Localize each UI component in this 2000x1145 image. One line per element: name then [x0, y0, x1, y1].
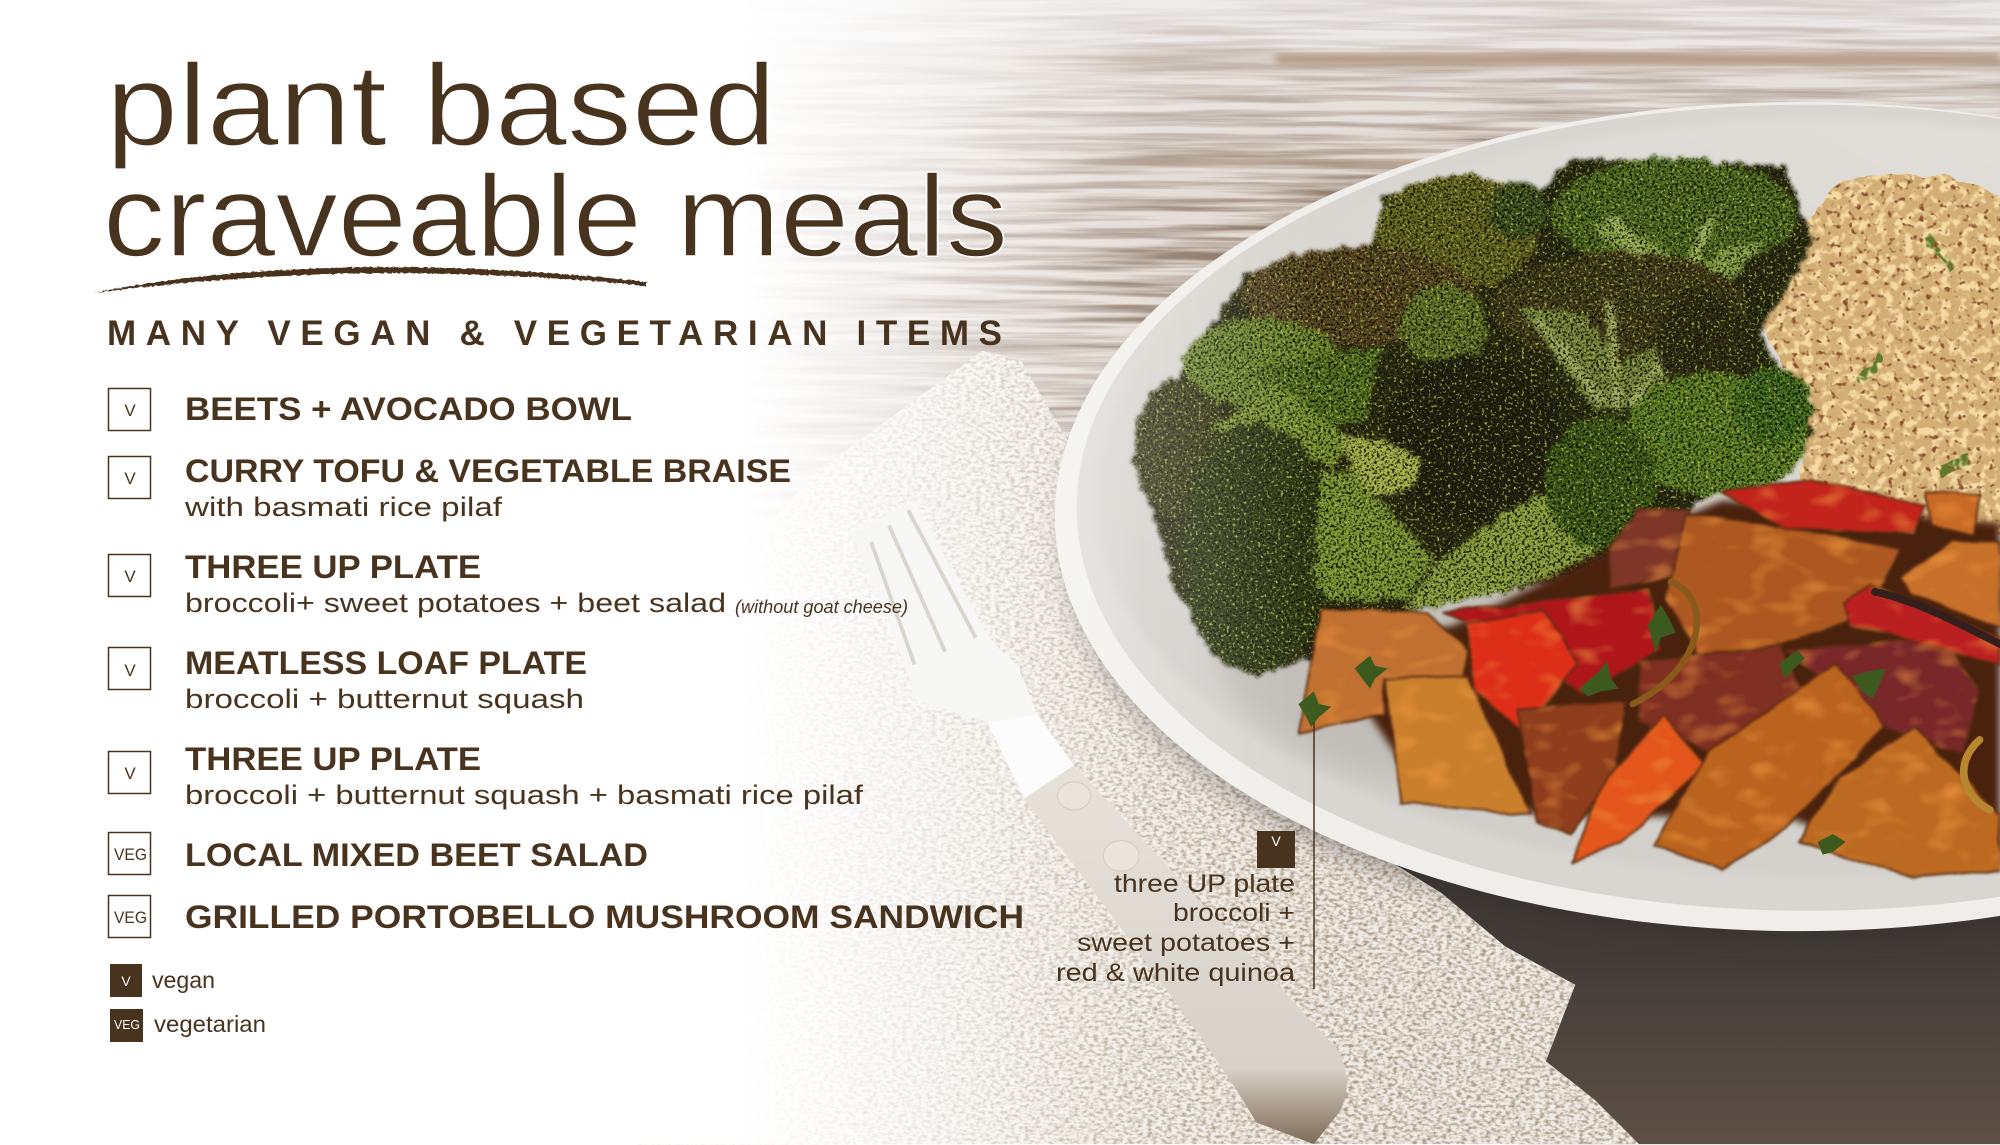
item: curry tofu: CURRY TOFU & VEGETABLE BRAISE: [185, 453, 791, 489]
brush underline: [92, 267, 647, 293]
item: meatless loaf plate: [108, 645, 587, 714]
callout text: red & white quinoa: [1056, 959, 1295, 987]
callout text: [1056, 870, 1295, 987]
dark underlay for vegetables: [1327, 500, 2000, 867]
legend: vegan: [110, 964, 215, 997]
legend: vegetarian: vegetarian: [154, 1011, 266, 1037]
item: local mixed beet salad: VEG: [114, 845, 147, 864]
menu list: [108, 388, 1024, 938]
callout text: three UP plate: [1114, 870, 1295, 898]
callout text: sweet potatoes +: [1077, 929, 1295, 957]
wood table top: [776, 0, 2000, 514]
callout leader line: [1313, 722, 1315, 989]
fork head and neck: [852, 500, 1074, 798]
item: local mixed beet salad: [108, 832, 648, 874]
legend: [110, 964, 266, 1042]
onion strips and charred skin: [1633, 582, 2000, 810]
herb flecks: [1298, 605, 1885, 855]
broccoli underlay: [1135, 159, 1814, 676]
broccoli cluster: [1134, 158, 1814, 676]
callout vegan badge: [1257, 831, 1295, 868]
fork handle: [1024, 765, 1347, 1144]
plate: [1055, 102, 2000, 941]
item: beets + avocado bowl: BEETS + AVOCADO BOWL: [185, 391, 632, 427]
quinoa: [1750, 176, 2000, 536]
title: craveable meals: [103, 151, 1008, 281]
callout vegan badge: V: [1271, 833, 1281, 849]
item: grilled portobello: GRILLED PORTOBELLO MUSHROOM SANDWICH: [185, 899, 1024, 935]
roasted vegetables: [1298, 480, 2000, 878]
item: grilled portobello: VEG: [114, 908, 147, 927]
legend: vegetarian: [110, 1009, 266, 1042]
title: plant based: [106, 40, 776, 170]
item: three up plate, beet salad: THREE UP PLATE: [185, 549, 481, 585]
title: [103, 40, 1008, 281]
legend: vegan: V: [121, 973, 131, 989]
napkin: [638, 351, 1639, 1144]
item: three up plate, basmati: THREE UP PLATE: [185, 741, 481, 777]
callout: pictured plate: [1056, 722, 1314, 989]
item: three up plate, basmati: [108, 741, 864, 810]
background photo: table, napkin, plate: [638, 0, 2000, 1144]
item: local mixed beet salad: LOCAL MIXED BEET SALAD: [185, 837, 648, 873]
item: curry tofu: V: [124, 469, 136, 488]
legend: vegan: vegan: [152, 967, 215, 993]
callout text: broccoli +: [1173, 899, 1295, 927]
item: three up plate, beet salad: [108, 549, 908, 618]
item: three up plate, basmati: broccoli + butternut squash + basmati rice pilaf: [185, 780, 864, 810]
item: beets + avocado bowl: [108, 388, 632, 430]
item: curry tofu: [108, 453, 791, 522]
item: three up plate, beet salad: V: [124, 567, 136, 586]
item: beets + avocado bowl: V: [124, 401, 136, 420]
subtitle: MANY VEGAN & VEGETARIAN ITEMS: [107, 314, 1002, 353]
item: meatless loaf plate: MEATLESS LOAF PLATE: [185, 645, 587, 681]
item: meatless loaf plate: V: [124, 661, 136, 680]
item: three up plate, beet salad: (without goat cheese): [735, 597, 908, 617]
item: three up plate, beet salad: broccoli+ sweet potatoes + beet salad: [185, 588, 726, 618]
fork: [852, 500, 1347, 1144]
dark table surface: [1352, 765, 2000, 1144]
item: curry tofu: with basmati rice pilaf: [184, 492, 503, 522]
item: three up plate, basmati: V: [124, 764, 136, 783]
legend: vegetarian: VEG: [114, 1017, 140, 1032]
item: meatless loaf plate: broccoli + butternut squash: [185, 684, 584, 714]
